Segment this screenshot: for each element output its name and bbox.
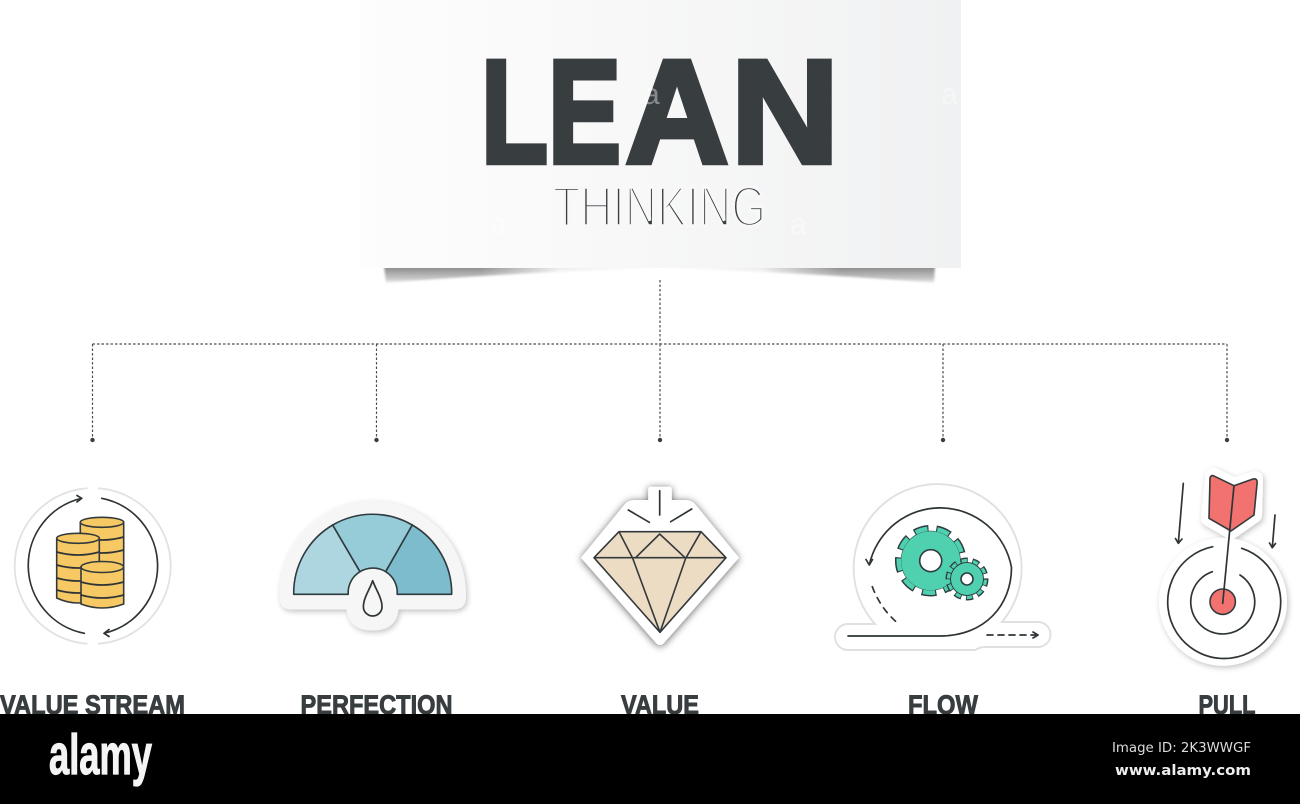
big gear	[899, 529, 963, 593]
target rings	[1168, 547, 1281, 659]
panel: title card	[360, 0, 961, 283]
sticker	[1160, 476, 1286, 665]
card sheet	[360, 0, 961, 268]
icon: coins with cycle arrows	[15, 486, 171, 646]
sticker	[280, 502, 465, 630]
needle	[363, 581, 382, 616]
labels: VALUE STREAM	[0, 690, 185, 720]
footer bar	[0, 714, 1300, 804]
fletching	[1209, 476, 1257, 531]
title: LEAN: A	[626, 30, 728, 194]
website: www.alamy.com	[1115, 763, 1251, 779]
logo: alamy: alamy	[49, 723, 152, 787]
small gear	[948, 560, 986, 598]
flow arrows	[848, 508, 1038, 638]
subtitle: THINKING: THINKING	[553, 175, 766, 239]
shaft and motion arrows	[1176, 483, 1276, 603]
cycle arrows	[28, 496, 158, 636]
labels	[0, 690, 1256, 720]
icon: diamond	[581, 487, 739, 645]
watermark marks: a	[790, 208, 807, 241]
sticker	[581, 487, 739, 645]
card shadow	[384, 266, 935, 283]
coin stacks	[57, 517, 124, 608]
sticker	[835, 484, 1050, 650]
labels: FLOW	[908, 690, 978, 720]
title: LEAN	[481, 30, 839, 194]
watermark marks: a	[643, 78, 660, 111]
sparkle rays	[628, 491, 692, 522]
watermark marks	[490, 78, 958, 241]
bullseye	[1210, 589, 1235, 614]
watermark marks: a	[490, 208, 507, 241]
gauge segments	[294, 514, 452, 594]
watermark marks: a	[941, 78, 958, 111]
icon: gauge	[280, 502, 465, 630]
title: LEAN: N	[731, 30, 839, 194]
icon: arrow hitting target	[1160, 476, 1286, 665]
sticker ring	[15, 486, 171, 646]
title: LEAN: L	[481, 30, 548, 194]
labels: VALUE	[621, 690, 699, 720]
gem	[594, 532, 726, 632]
icon: gears in flow loop	[835, 484, 1050, 650]
labels: PERFECTION	[300, 690, 452, 720]
image id: Image ID: 2K3WWGF	[1112, 740, 1251, 756]
title: LEAN: E	[548, 30, 621, 194]
labels: PULL	[1198, 690, 1256, 720]
connector tree	[90, 280, 1229, 442]
